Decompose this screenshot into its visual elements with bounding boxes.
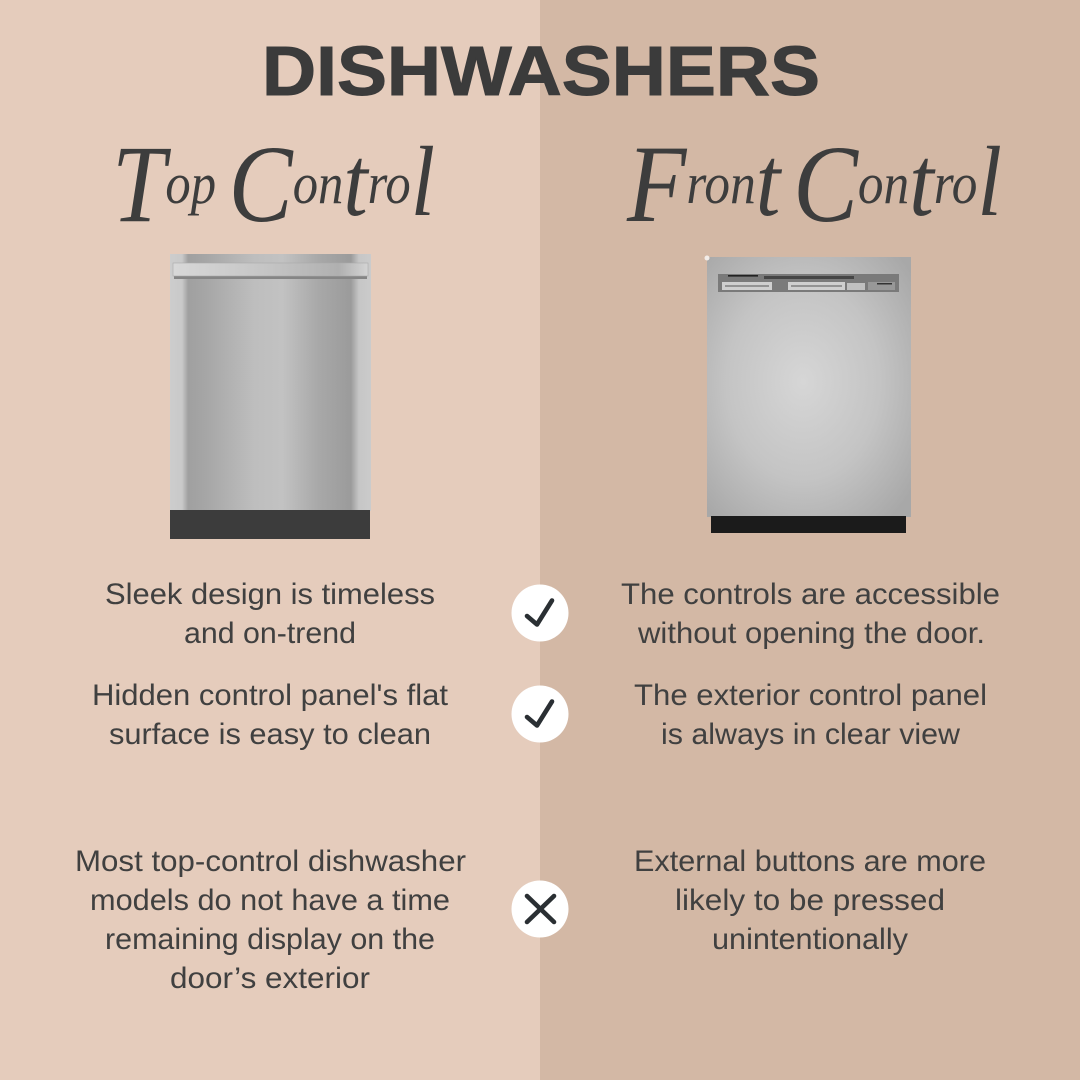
heading: top control: T (112, 123, 171, 245)
heading: top control: t (343, 126, 370, 237)
heading: front control: C (793, 123, 859, 245)
right text: row 3 (634, 845, 986, 956)
right text: row 2: is always in clear view (661, 718, 960, 751)
right text: row 1: without opening the door. (637, 617, 985, 650)
icon: check row 1 (512, 584, 568, 642)
left text: row 3: Most top-control dishwasher (75, 845, 466, 878)
left panel background (0, 0, 540, 1080)
heading: front control: t (756, 126, 782, 237)
right text: row 2 (634, 679, 987, 751)
heading: front control: on (858, 151, 909, 216)
title: DISHWASHERS (262, 32, 820, 110)
heading: top control: l (411, 126, 435, 237)
left text: row 2: Hidden control panel's flat (92, 679, 449, 712)
left text: row 2 (92, 679, 449, 751)
right text: row 3: External buttons are more (634, 845, 986, 878)
heading: front control: t (909, 126, 936, 237)
image: top control dishwasher (170, 254, 371, 539)
left text: row 3 (75, 845, 466, 995)
right text: row 3: unintentionally (712, 923, 908, 956)
left text: row 1: and on-trend (184, 617, 356, 650)
heading: top control: C (229, 123, 294, 245)
right text: row 2: The exterior control panel (634, 679, 987, 712)
right panel background (540, 0, 1080, 1080)
heading: front control: F (626, 123, 688, 245)
heading: front control: l (977, 126, 1002, 237)
image: front control dishwasher (704, 256, 911, 533)
heading: top control: ro (368, 151, 411, 216)
left text: row 1: Sleek design is timeless (105, 578, 435, 611)
icon: check row 2 (512, 686, 568, 742)
right text: row 1 (621, 578, 1000, 650)
heading: front control: ro (934, 151, 977, 216)
left text: row 3: door’s exterior (170, 962, 370, 995)
left text: row 2: surface is easy to clean (109, 718, 431, 751)
heading: top control: on (293, 151, 343, 216)
heading: front control: ron (686, 151, 756, 216)
right text: row 1: The controls are accessible (621, 578, 1000, 611)
heading: top control: op (165, 151, 229, 216)
right text: row 3: likely to be pressed (675, 884, 945, 917)
icon: cross row 3 (512, 880, 568, 938)
left text: row 3: models do not have a time (90, 884, 450, 917)
left text: row 3: remaining display on the (105, 923, 435, 956)
left text: row 1 (105, 578, 435, 650)
